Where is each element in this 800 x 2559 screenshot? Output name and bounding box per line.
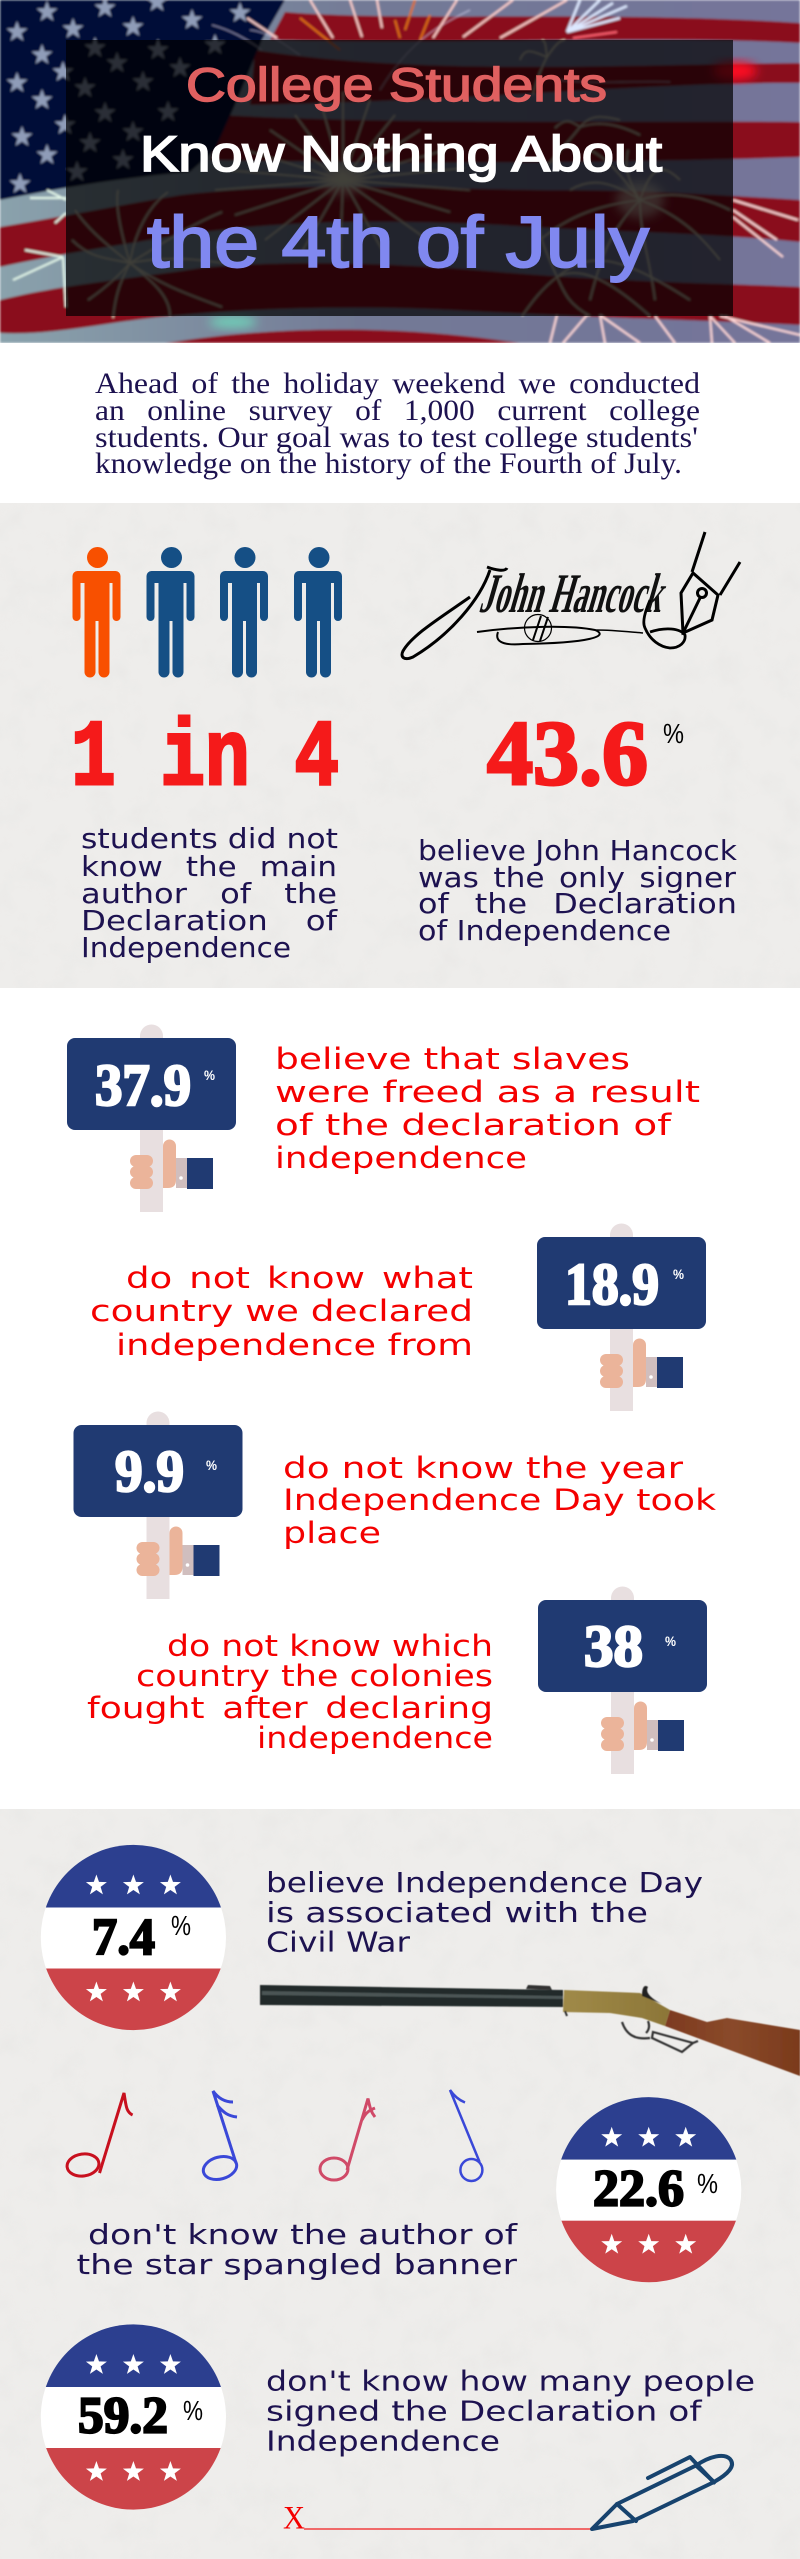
sign: 37.9 percent: % bbox=[204, 1067, 215, 1083]
panel: civil war, anthem and signers statistics bbox=[0, 1809, 800, 2559]
text: country fought: fought after declaring bbox=[87, 1691, 493, 1725]
text: country declared from: independence from bbox=[116, 1328, 473, 1362]
sign: 37.9 percent: 37.9 bbox=[95, 1052, 191, 1118]
sign: 18.9 percent: 18.9 bbox=[565, 1251, 659, 1317]
stat: 43.6 percent: 43.6 bbox=[487, 702, 648, 804]
panel: author and signer statistics bbox=[0, 503, 800, 988]
text: main author: Declaration of bbox=[81, 904, 338, 937]
text: country fought: do not know which bbox=[167, 1629, 493, 1663]
intro text: knowledge on the history of the Fourth of July. bbox=[95, 447, 682, 480]
sign: 9.9 percent bbox=[74, 1412, 242, 1599]
icon: music note pink bbox=[320, 2099, 375, 2180]
icon: fountain pen nib bbox=[681, 532, 740, 633]
text: slaves freed: were freed as a result bbox=[275, 1075, 700, 1109]
badge: 22.6 percent: 22.6 bbox=[593, 2161, 684, 2218]
text: country declared from bbox=[90, 1261, 473, 1362]
sign: 9.9 percent: % bbox=[206, 1457, 217, 1473]
text: civil war: believe Independence Day bbox=[266, 1866, 703, 1899]
text: country fought: country the colonies bbox=[136, 1659, 493, 1693]
sign: 38 percent: 38 bbox=[584, 1613, 643, 1679]
badge: 7.4 percent: % bbox=[171, 1910, 191, 1941]
icon: four people, one highlighted bbox=[72, 547, 342, 678]
text: star spangled banner bbox=[76, 2218, 518, 2281]
badge: 7.4 percent bbox=[40, 1844, 226, 2030]
text: country fought bbox=[87, 1629, 493, 1755]
text: only signer: of the Declaration bbox=[418, 887, 737, 920]
text: main author bbox=[81, 822, 338, 964]
text: star spangled banner: the star spangled banner bbox=[76, 2248, 518, 2281]
title line 1: College Students bbox=[186, 58, 607, 111]
title line 2: Know Nothing About bbox=[140, 126, 662, 182]
badge: 59.2 percent bbox=[40, 2324, 226, 2510]
text: country declared from: country we declared bbox=[90, 1294, 473, 1328]
text: civil war: Civil War bbox=[266, 1926, 411, 1958]
text: main author: author of the bbox=[81, 877, 337, 910]
title line 3: the 4th of July bbox=[147, 203, 649, 283]
text: slaves freed: believe that slaves bbox=[275, 1042, 630, 1076]
icon: music note blue bbox=[201, 2091, 239, 2183]
text: year of independence: do not know the year bbox=[283, 1451, 683, 1485]
text: year of independence bbox=[283, 1451, 716, 1550]
text: only signer: of Independence bbox=[418, 914, 671, 947]
sign: 37.9 percent bbox=[67, 1024, 236, 1212]
text: country declared from: do not know what bbox=[126, 1261, 473, 1295]
text: main author: Independence bbox=[81, 931, 291, 964]
sign: 18.9 percent bbox=[537, 1224, 706, 1411]
text: year of independence: place bbox=[283, 1516, 381, 1550]
badge: 7.4 percent: 7.4 bbox=[92, 1909, 155, 1966]
icon: rifle bbox=[260, 1985, 800, 2076]
intro text: Ahead of the holiday weekend we conducted bbox=[95, 367, 700, 400]
text: slaves freed: independence bbox=[275, 1141, 527, 1175]
hero dark overlay panel bbox=[66, 40, 733, 316]
sign: 18.9 percent: % bbox=[673, 1266, 684, 1282]
badge: 59.2 percent: % bbox=[183, 2395, 203, 2426]
intro text: students. Our goal was to test college students' bbox=[95, 421, 698, 454]
text: only signer: was the only signer bbox=[418, 861, 737, 894]
text: main author: know the main bbox=[81, 850, 337, 883]
sign: 38 percent: % bbox=[665, 1633, 676, 1649]
intro text: an online survey of 1,000 current college bbox=[95, 394, 700, 427]
sign: 38 percent bbox=[538, 1586, 707, 1774]
text: only signer: believe John Hancock bbox=[418, 834, 738, 867]
text: how many signed: signed the Declaration of bbox=[266, 2394, 703, 2428]
text: slaves freed bbox=[275, 1042, 700, 1175]
icon: John Hancock signature bbox=[402, 563, 685, 659]
hero: flag and fireworks photo bbox=[0, 0, 800, 343]
badge: 22.6 percent: % bbox=[697, 2168, 718, 2199]
text: how many signed: Independence bbox=[266, 2424, 500, 2458]
text: how many signed: don't know how many people bbox=[266, 2364, 755, 2398]
text: year of independence: Independence Day took bbox=[283, 1483, 716, 1517]
icon: music note blue thin bbox=[450, 2090, 482, 2181]
percent sign: % bbox=[663, 718, 684, 749]
text: civil war: is associated with the bbox=[266, 1896, 648, 1929]
badge: 22.6 percent bbox=[556, 2097, 742, 2283]
signature line with x: X bbox=[283, 2500, 305, 2536]
icon: ballpoint pen bbox=[592, 2456, 732, 2529]
intro text bbox=[95, 367, 700, 480]
text: star spangled banner: don't know the author of bbox=[88, 2218, 518, 2251]
text: only signer bbox=[418, 834, 738, 947]
text: civil war bbox=[266, 1866, 703, 1958]
sign: 9.9 percent: 9.9 bbox=[115, 1438, 184, 1504]
badge: 59.2 percent: 59.2 bbox=[78, 2388, 168, 2445]
text: slaves freed: of the declaration of bbox=[275, 1108, 672, 1142]
text: main author: students did not bbox=[81, 822, 338, 855]
icon: music note red bbox=[66, 2093, 133, 2178]
text: country fought: independence bbox=[257, 1721, 493, 1755]
text: how many signed bbox=[266, 2364, 755, 2458]
stat: 1 in 4: 1 in 4 bbox=[71, 707, 339, 813]
